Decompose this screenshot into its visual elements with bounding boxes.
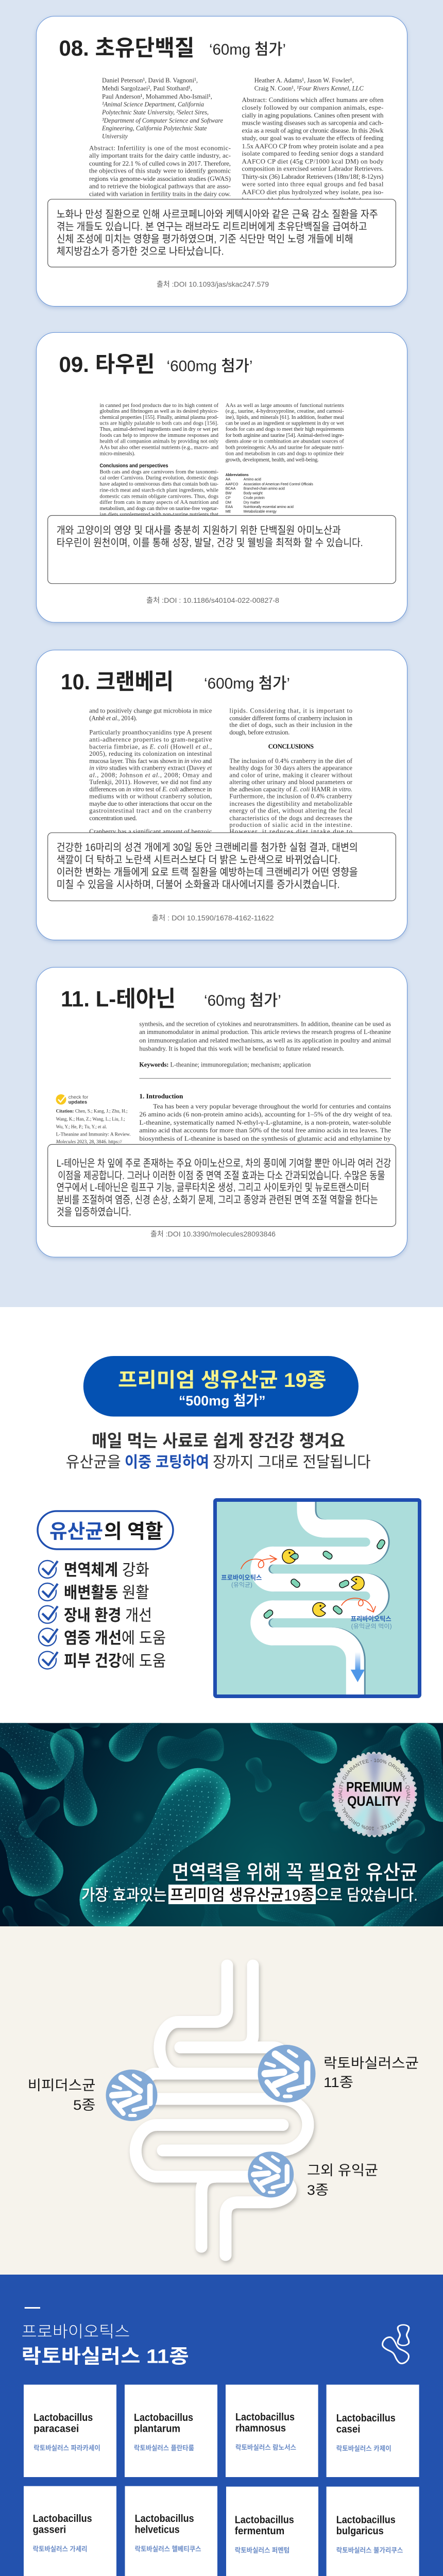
paper excerpt: foods can help to improve the immune responses and: [100, 433, 219, 438]
paper excerpt: AAs as well as large amounts of functional nutrients: [226, 403, 344, 409]
callout: 체지방감소가 증가한 것으로 나타났습니다.: [57, 245, 224, 257]
paper excerpt: energy of the diet, without altering the fecal: [229, 807, 352, 815]
panel: 09 taurine: [36, 332, 407, 622]
card: gasseri: 락토바실러스 가세리: [33, 2545, 88, 2553]
paper excerpt: bacteria fimbriae, as E. coli (Howell et al.,: [89, 743, 212, 751]
citation: Wang, K.; Han, Z.; Wang, L.; Liu, J.;: [56, 1117, 125, 1122]
paper excerpt: an immunomodulator in animal production. This article reviews the research progress of L-theanine: [139, 1028, 391, 1036]
card: gasseri: gasseri: [33, 2524, 66, 2535]
banner text: 으로 담았습니다.: [316, 1886, 418, 1904]
icon: bacillus: [380, 2325, 411, 2366]
glow spots: [19, 1730, 371, 1827]
paper excerpt: and color of urine, making it clearer without: [229, 772, 352, 779]
paper excerpt: Craig N. Coon¹, ¹Four Rivers Kennel, LLC: [254, 84, 364, 92]
seal: premium quality: QUALITY: [347, 1793, 401, 1809]
paper excerpt: Tufenkji, 2011). However, we did not find any: [89, 778, 212, 786]
checklist: [39, 1561, 166, 1670]
callout: [48, 515, 396, 584]
rule: [25, 2307, 40, 2309]
card: helveticus: [125, 2486, 217, 2576]
card: fermentum: [226, 2486, 318, 2576]
abbreviations list: DM: [226, 500, 231, 505]
callout: 분비를 조절하여 염증, 신경 손상, 소화기 문제, 그리고 종양과 관련된 면역 조절 역할을 한다는: [57, 1194, 378, 1206]
abbreviations list: BCAA: [226, 486, 235, 490]
source: 출처 : DOI 10.1590/1678-4162-11622: [152, 914, 274, 922]
paper excerpt: and to retrieve the biological pathways that are asso-: [89, 182, 231, 190]
paper excerpt: Particularly proanthocyanidins type A present: [89, 728, 212, 736]
card: plantarum: Lactobacillus: [134, 2412, 193, 2424]
paper excerpt: domestic cats remain obligate carnivores. Thus, dogs: [100, 494, 218, 499]
checklist: 면역체계 강화: [64, 1561, 149, 1579]
dose: 600mg: ‘600mg 첨가’: [167, 358, 252, 375]
callout: [48, 833, 396, 901]
label: others 3: [307, 2163, 378, 2198]
card: casei: Lactobacillus: [336, 2413, 396, 2424]
paper excerpt: rine-rich meat and starch-rich plant ingredients, while: [100, 488, 218, 494]
card: helveticus: Lactobacillus: [135, 2513, 194, 2524]
intro text: 장까지 그대로 전달됩니다: [213, 1454, 371, 1471]
paper excerpt: isolate compared to feeding senior dogs a standard: [242, 149, 384, 157]
card: casei: 락토바실러스 카제이: [336, 2445, 391, 2452]
card: fermentum: 락토바실러스 퍼멘텀: [235, 2547, 289, 2554]
icon: check for updates: updates: [69, 1099, 87, 1105]
card: bulgaricus: [327, 2486, 419, 2576]
paper excerpt: foods for cats and dogs to meet their high requirements: [226, 427, 344, 432]
paper excerpt: cially in aging populations. Canines often present with: [242, 111, 384, 119]
paper excerpt: can be used as an ingredient or supplement in dry or wet: [226, 420, 344, 427]
abbreviations list: EAA: [226, 504, 233, 509]
callout: [48, 199, 396, 267]
paper excerpt: characteristics of the dogs and decreases the: [229, 815, 352, 822]
paper excerpt: ally important traits for the dairy cattle industry, ac-: [89, 151, 231, 159]
citation: Molecules 2023, 28, 3846. https://: [56, 1140, 122, 1145]
callout: 건강한 16마리의 성견 개에게 30일 동안 크랜베리를 첨가한 실험 결과, 대변의: [57, 842, 358, 853]
paper excerpt: mediums with or without cranberry solution,: [89, 792, 212, 800]
group: lactobacillus 11: [22, 2307, 419, 2576]
paper excerpt: tion and metabolism in cats and dogs to optimize their: [226, 451, 344, 457]
paper excerpt: AAFCO CP diet (45g CP/1000 kcal DM) on body: [242, 157, 384, 165]
paper excerpt: L-theanine, systematically named N-ethyl-γ-L-glutamine, is a non-protein, water-soluble: [139, 1118, 391, 1126]
label: lactobacillus 11: [323, 2056, 419, 2090]
checklist: 피부 건강에 도움: [64, 1652, 166, 1670]
card: paracasei: paracasei: [33, 2423, 79, 2434]
intro text: 이중 코팅하여: [125, 1454, 209, 1471]
arrow: down: [351, 1652, 365, 1682]
paper excerpt: Abstract: Infertility is one of the most economic-: [89, 144, 231, 151]
abbreviations list: Metabolizable energy: [244, 509, 277, 514]
source: 출처 :DOI 10.1093/jas/skac247.579: [157, 280, 269, 289]
label: lactobacillus 11: 11종: [323, 2075, 353, 2090]
paper excerpt: (Anhê et al., 2014).: [89, 715, 137, 722]
card: plantarum: plantarum: [134, 2423, 180, 2434]
paper excerpt: 1. Introduction: [139, 1092, 183, 1100]
card: fermentum: Lactobacillus: [235, 2514, 294, 2526]
heading: [22, 2323, 189, 2368]
citation: [56, 1109, 131, 1145]
card: bulgaricus: bulgaricus: [336, 2526, 384, 2537]
bacteria circle: others: [248, 2151, 294, 2197]
arrow: prebiotics: [342, 1598, 376, 1612]
main microbe: [79, 1768, 231, 1926]
badge: premium probiotics 19: 프리미엄 생유산균 19종: [118, 1369, 327, 1392]
abbreviations list: CP: [226, 495, 231, 500]
paper excerpt: the objectives of this study were to identify genomic: [89, 167, 231, 175]
card: gasseri: [24, 2486, 116, 2576]
paper excerpt: The inclusion of 0.4% cranberry in the diet of: [229, 757, 353, 765]
paper excerpt: the diet of dogs, such as their inclusion in the: [229, 721, 352, 728]
abbreviations list: Nutritionally essential amino acid: [244, 504, 294, 509]
paper excerpt: micro-minerals).: [100, 451, 135, 457]
bright microbes: [0, 1723, 443, 1926]
paper excerpt: for both arginine and taurine [54]. Animal-derived ingre-: [226, 433, 344, 438]
paper excerpt: mucosa layer. This fact was shown in in vivo and: [89, 757, 212, 765]
intro text: 유산균을: [66, 1454, 121, 1471]
heading pill: role of probiotics: 의 역할: [104, 1521, 163, 1543]
section: research background: [0, 0, 443, 1307]
paper excerpt: growth, development, health, and well-being.: [226, 457, 319, 463]
probiotic eaters: [282, 1550, 364, 1617]
checklist: 장내 환경 개선: [64, 1606, 152, 1624]
paper excerpt: However, it reduces diet intake due to: [229, 828, 352, 835]
paper excerpt: healthy dogs for 30 days alters the appearance: [229, 764, 352, 771]
label: bifidus 5: [28, 2078, 95, 2113]
paper excerpt: 2005), reducing its colonization on intestinal: [89, 750, 212, 757]
panel: 10 cranberry: [36, 650, 407, 940]
banner: microbes: [0, 1723, 443, 1926]
paper excerpt: cal order Carnivora. During evolution, domestic dogs: [100, 476, 218, 481]
callout: 이러한 변화는 개들에게 요로 트랙 질환을 예방하는데 크랜베리가 어떤 영향을: [57, 867, 358, 878]
card: plantarum: [125, 2385, 217, 2477]
callout: 타우린이 원천이며, 이를 통해 성장, 발달, 건강 및 웰빙을 최적화 할 수 있습니다.: [57, 537, 363, 549]
card background: [36, 332, 407, 622]
callout: [48, 1144, 396, 1227]
card background: [36, 968, 407, 1257]
paper excerpt: differ from cats in many aspects of AA nutrition and: [100, 500, 219, 505]
card: bulgaricus: 락토바실러스 불가리쿠스: [336, 2547, 403, 2554]
banner text: 프리미엄 생유산균19종: [170, 1886, 314, 1904]
paper excerpt: in vitro studies with cranberry extract (Davey et: [89, 764, 212, 771]
paper excerpt: production of sialic acid in the intestine.: [229, 821, 352, 828]
label: prebiotics: [351, 1616, 392, 1630]
paper excerpt: [100, 403, 344, 517]
paper excerpt: dough, before extrusion.: [229, 728, 289, 736]
paper excerpt: biosynthesis of L-theanine is based on the synthesis of glutamic acid and ethylamine by: [139, 1134, 391, 1142]
card background: [36, 650, 407, 940]
paper excerpt: AAs but also other essential nutrients (e.g., macro- and: [100, 445, 219, 450]
section: strain list: [0, 2275, 443, 2576]
label: probiotics: (유익균): [231, 1582, 252, 1588]
section: gut diagram: [0, 1926, 443, 2275]
bacteria circle: bifidus: [106, 2070, 158, 2121]
paper excerpt: health of all companion animals by providing not only: [100, 439, 219, 445]
paper excerpt: Conclusions and perspectives: [100, 463, 168, 469]
paper excerpt: husbandry. It is hoped that this work will be beneficial to future related research.: [139, 1044, 344, 1052]
banner text: 면역력을 위해 꼭 필요한 유산균: [172, 1862, 417, 1884]
abbreviations list: Crude protein: [244, 495, 265, 500]
label: prebiotics: 프리바이오틱스: [351, 1616, 391, 1623]
card: casei: [327, 2385, 419, 2477]
paper excerpt: synthesis, and the secretion of cytokines and neurotransmitters. In addition, theanine can be used as: [139, 1020, 391, 1027]
callout: 것을 입증하였습니다.: [57, 1206, 131, 1218]
paper excerpt: Keywords: L-theanine; immunoregulation; mechanism; application: [139, 1060, 311, 1068]
label: probiotics: 프로바이오틱스: [221, 1574, 262, 1582]
card: plantarum: 락토바실러스 플란타룸: [134, 2444, 194, 2452]
abbreviations list: AAFCO: [226, 482, 238, 486]
seal: premium quality: PREMIUM: [346, 1780, 402, 1795]
heading: 09: 09. 타우린: [59, 352, 155, 377]
paper excerpt: chemical properties [155]. Finally, animal plasma prod-: [100, 415, 218, 420]
paper excerpt: ¹Animal Science Department, California: [102, 100, 204, 108]
paper excerpt: in canned pet food products due to its high content of: [100, 403, 218, 409]
paper excerpt: late, or added fat and sugar (control). All dogs par-: [242, 196, 383, 204]
dose: 600mg: ‘600mg 첨가’: [204, 675, 290, 692]
paper excerpt: Furthermore, the inclusion of 0.4% cranberry: [229, 792, 353, 800]
card: helveticus: 락토바실러스 헬베티쿠스: [135, 2545, 201, 2553]
heading: 10: 10. 크랜베리: [61, 670, 174, 694]
paper excerpt: Heather A. Adams¹, Jason W. Fowler¹,: [254, 76, 354, 84]
card: rhamnosus: Lactobacillus: [235, 2412, 295, 2423]
paper excerpt: (e.g., taurine, 4-hydroxyproline, creatine, and carnosi-: [226, 409, 344, 414]
paper excerpt: al., 2008; Johnson et al., 2008; Omay and: [89, 772, 212, 779]
paper excerpt: Tea has been a very popular beverage throughout the world for centuries and contains: [153, 1103, 391, 1110]
label: probiotics: [221, 1574, 262, 1588]
label: lactobacillus 11: 락토바실러스균: [323, 2056, 419, 2071]
paper excerpt: anti-adherence properties to gram-negative: [89, 736, 212, 743]
paper excerpt: ciated with variation in fertility traits in the dairy cow.: [89, 190, 231, 198]
arrow: probiotics: [241, 1555, 277, 1569]
heading pill: role of probiotics: [38, 1511, 173, 1549]
callout: 미칠 수 있음을 시사하며, 더불어 소화율과 대사에너지를 증가시켰습니다.: [57, 879, 340, 890]
section: lactic acid bacteria intro: [0, 1307, 443, 1723]
abbreviations list: Body weight: [244, 491, 263, 496]
label: others 3: 3종: [307, 2182, 329, 2198]
abbreviations list: Abbreviations: [226, 472, 249, 477]
card: rhamnosus: rhamnosus: [235, 2422, 286, 2434]
banner text: 가장 효과있는: [81, 1886, 167, 1904]
callout: 신체 조성에 미치는 영향을 평가하였으며, 기준 식단만 먹인 노령 개들에 비해: [57, 233, 353, 245]
label: bifidus 5: 5종: [73, 2097, 95, 2113]
paper excerpt: have adapted to omnivorous diets that contain both tau-: [100, 481, 218, 487]
paper excerpt: concentration used.: [89, 815, 137, 822]
paper excerpt: 1.5x AAFCO CP from whey protein isolate and a pea: [242, 142, 384, 150]
checklist: 염증 개선에 도움: [64, 1629, 166, 1647]
card: casei: casei: [336, 2424, 360, 2435]
label: prebiotics: (유익균의 먹이): [351, 1623, 392, 1630]
abbreviations list: Association of American Feed Control Officials: [244, 482, 313, 486]
paper excerpt: Cranberry has a significant amount of benzoic: [89, 828, 212, 835]
paper excerpt: increases the digestibility and metabolizable: [229, 800, 352, 807]
paper excerpt: [89, 707, 353, 835]
paper excerpt: ian diets supplemented with non-taurine nutrients that: [100, 512, 218, 517]
source: 출처 :DOI : 10.1186/s40104-022-00827-8: [146, 596, 279, 604]
paper excerpt: counting for 22.1 % of culled cows in 2017. Therefore,: [89, 159, 231, 167]
card: helveticus: helveticus: [135, 2524, 180, 2535]
paper excerpt: [139, 1020, 392, 1142]
dim microbes: [3, 1723, 425, 1926]
paper excerpt: Daniel Peterson¹, David B. Vagnoni¹,: [102, 76, 198, 84]
paper excerpt: differences on in vitro test of E. coli adherence in: [89, 786, 212, 793]
paper excerpt: altering other urinary and blood parameters or: [229, 778, 353, 786]
citation: L-Theanine and Immunity: A Review.: [56, 1132, 131, 1138]
paper excerpt: closely followed by our companion animals, espe-: [242, 104, 383, 111]
abbreviations list: Branched-chain amino acid: [244, 486, 285, 490]
paper excerpt: regions via genome-wide association studies (GWAS): [89, 175, 231, 182]
paper excerpt: study, our goal was to evaluate the effects of feeding: [242, 134, 384, 142]
heading pill: role of probiotics: 유산균: [49, 1521, 103, 1543]
paper excerpt: both proteinogenic AAs and taurine for adequate nutri-: [226, 445, 344, 450]
card: rhamnosus: 락토바실러스 람노서스: [235, 2444, 296, 2451]
dose: 60mg: ‘60mg 첨가’: [204, 992, 281, 1009]
paper excerpt: Thirty-six (36) Labrador Retrievers (18m/18f; 8-12yrs): [242, 173, 383, 180]
paper excerpt: CONCLUSIONS: [268, 743, 314, 750]
dose: 60mg: ‘60mg 첨가’: [209, 41, 286, 58]
paper excerpt: Paul Anderson¹, Mohammed Abo-Ismail¹,: [102, 92, 212, 100]
paper excerpt: Thus, animal-derived ingredients used in dry or wet pet: [100, 427, 218, 432]
panel: 11 L-theanine: [36, 968, 407, 1257]
callout: 색깔이 더 탁하고 노란색 시트러스보다 더 밝은 노란색으로 바뀌었습니다.: [57, 854, 340, 866]
callout: 연구에서 L-테아닌은 림프구 기능, 글루타치온 생성, 그리고 사이토카인 및 뉴로트랜스미터: [57, 1182, 369, 1194]
heading: 08: 08. 초유단백질: [59, 36, 195, 61]
paper excerpt: [89, 76, 384, 204]
paper excerpt: ine), lipids, and minerals [61]. In addition, feather meal: [226, 415, 344, 420]
heading: 프로바이오틱스: [22, 2323, 130, 2341]
abbreviations list: [226, 472, 313, 514]
paper excerpt: Polytechnic State University, ²Select Sires,: [101, 108, 209, 116]
paper excerpt: Mehdi Sargolzaei², Paul Stothard¹,: [102, 84, 192, 92]
citation: Wu, Y.; He, P.; Tu, Y.; et al.: [56, 1125, 107, 1130]
intro text: 매일 먹는 사료로 쉽게 장건강 챙겨요: [92, 1431, 345, 1450]
paper excerpt: dients alone or in combination are abundant sources of: [226, 439, 344, 445]
icon: check for updates: check for: [69, 1095, 88, 1100]
diagram: intestine: [213, 1498, 421, 1698]
card: paracasei: Lactobacillus: [33, 2412, 93, 2424]
badge: premium probiotics 19: “500mg 첨가”: [179, 1393, 266, 1409]
paper excerpt: lipids. Considering that, it is important to: [229, 707, 352, 715]
paper excerpt: amino acid that accounts for more than 50% of the total free amino acids in tea leaves. The: [139, 1126, 391, 1134]
paper excerpt: metabolism, and dogs can thrive on taurine-free vegetar-: [100, 506, 218, 512]
heading: 11: 11. L-테아닌: [61, 987, 176, 1012]
banner text: [81, 1862, 418, 1904]
abbreviations list: BW: [226, 491, 231, 496]
source: 출처 :DOI 10.3390/molecules28093846: [150, 1230, 276, 1238]
bacteria pills: [263, 1539, 386, 1619]
paper excerpt: exia as a result of aging or chronic disease. In this 26wk: [242, 127, 384, 134]
intro text: [66, 1431, 371, 1471]
callout: 겪는 개들도 있습니다. 본 연구는 래브라도 리트리버에게 초유단백질을 급여하고: [57, 221, 367, 232]
label: others 3: 그외 유익균: [307, 2163, 378, 2178]
card: paracasei: 락토바실러스 파라카세이: [33, 2444, 100, 2452]
abbreviations list: Amino acid: [244, 477, 261, 482]
intestine illustration: [135, 1965, 308, 2255]
paper excerpt: 26 amino acids (6 non-protein amino acids), accounting for 1–5% of the dry weight of tea.: [139, 1110, 392, 1118]
paper excerpt: consider different forms of cranberry inclusion in: [229, 715, 353, 722]
icon: check for updates: [56, 1094, 88, 1105]
card: bulgaricus: Lactobacillus: [336, 2514, 396, 2526]
paper excerpt: Engineering, California Polytechnic State: [101, 124, 207, 132]
paper excerpt: maybe due to other interactions that occur on the: [89, 800, 212, 807]
paper excerpt: the adhesion capacity of E. coli HAMR in vitro.: [229, 786, 352, 793]
paper excerpt: were sorted into three equal groups and fed basal: [242, 180, 384, 188]
panel: 08 colostrum protein: [36, 16, 407, 306]
callout: 개와 고양이의 영양 및 대사를 충분히 지원하기 위한 단백질원 아미노산과: [57, 524, 341, 536]
heading: 락토바실러스 11종: [22, 2346, 189, 2368]
badge: premium probiotics 19: [83, 1356, 359, 1417]
bacteria circle: lactobacillus: [258, 2045, 315, 2103]
paper excerpt: muscle wasting diseases such as sarcopenia and cach-: [242, 118, 383, 126]
paper excerpt: gastrointestinal tract and on the cranberry: [89, 807, 212, 815]
paper excerpt: and to positively change gut microbiota in mice: [89, 707, 212, 715]
paper excerpt: AAFCO diet plus hydrolyzed whey isolate, pea iso-: [242, 188, 383, 196]
seal: premium quality: 100% ORIGINAL - QUALITY GUARANTEE - 100% ORIGINAL - QUALITY GUARANTEE -: [338, 1759, 410, 1831]
paper excerpt: Both cats and dogs are carnivores from the taxonomi-: [100, 469, 218, 475]
paper excerpt: University: [102, 132, 128, 140]
card: paracasei: [24, 2385, 116, 2477]
paper excerpt: on immunoregulation and related mechanisms, as well as its application in poultry and animal: [139, 1037, 391, 1044]
paper excerpt: ³Department of Computer Science and Software: [102, 116, 223, 124]
abbreviations list: AA: [226, 477, 230, 482]
paper excerpt: globulins and fibrinogen as well as its desired physico-: [100, 409, 218, 414]
card: fermentum: fermentum: [235, 2526, 284, 2537]
card: gasseri: Lactobacillus: [33, 2513, 92, 2524]
paper excerpt: ucts are highly palatable to both cats and dogs [156].: [100, 420, 218, 427]
card: rhamnosus: [226, 2385, 318, 2477]
paper excerpt: Abstract: Conditions which affect humans are often: [242, 96, 384, 104]
card background: [36, 16, 407, 306]
abbreviations list: ME: [226, 509, 231, 514]
paper excerpt: composition in exercised senior Labrador Retrievers.: [242, 165, 383, 173]
label: bifidus 5: 비피더스균: [28, 2078, 95, 2093]
callout: 노화나 만성 질환으로 인해 사르코페니아와 케텍시아와 같은 근육 감소 질환을 자주: [57, 208, 378, 220]
abbreviations list: Dry matter: [244, 500, 260, 505]
checklist: 배변활동 원활: [64, 1584, 149, 1602]
citation: Citation: Chen, S.; Kang, J.; Zhu, H.;: [56, 1109, 128, 1114]
